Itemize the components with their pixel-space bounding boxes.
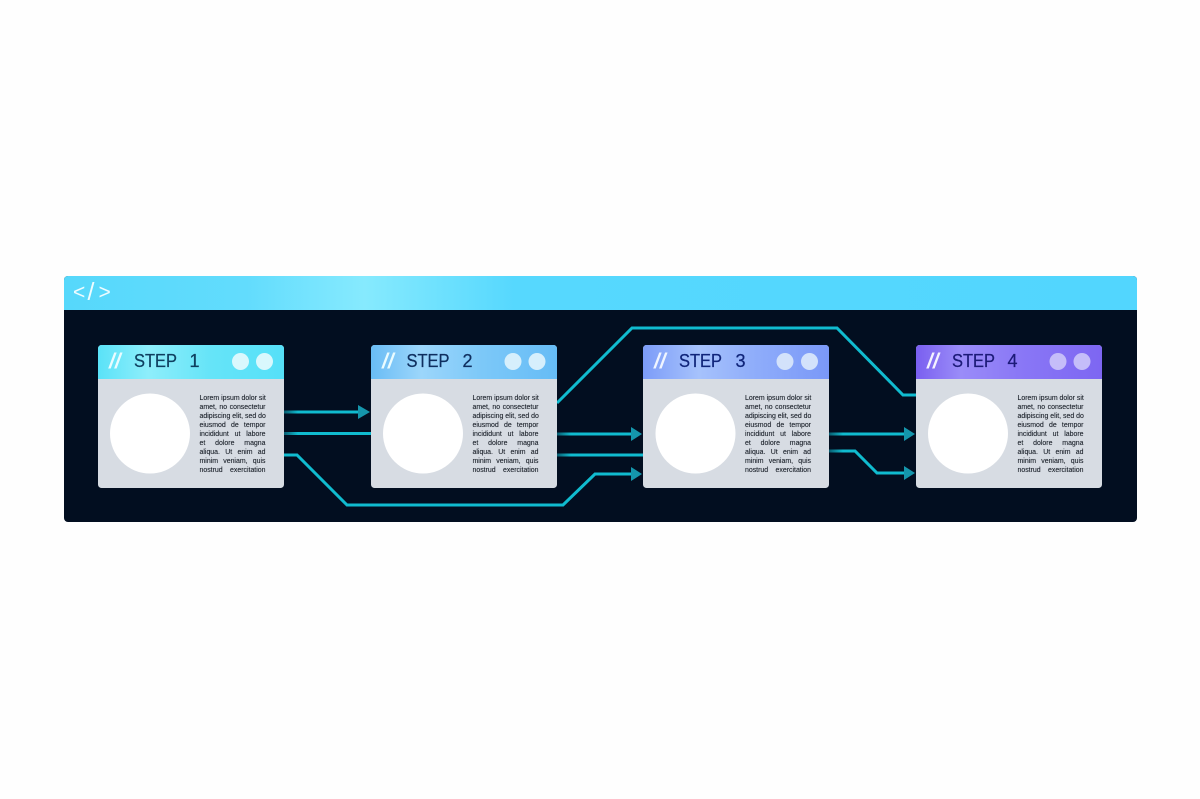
- text block: step 4 body: incididunt ut labore: [1018, 431, 1084, 438]
- step 1 heading: STEP: [134, 351, 177, 371]
- icon: code brackets: >: [98, 281, 111, 304]
- arrow: step 1 to step 2 upper: [284, 405, 370, 419]
- panel: step 1 card: [98, 345, 284, 488]
- window title bar: [64, 276, 1137, 310]
- line: step 2 to step 4 upper route: [557, 328, 916, 403]
- step 3 image circle: [656, 394, 736, 474]
- text block: step 3 body: eiusmod de tempor: [745, 422, 811, 429]
- arrow: step 3 to step 4 lower: [829, 451, 915, 480]
- panel: step 4 card: [916, 345, 1102, 488]
- step 3 window dots: [776, 353, 818, 370]
- text block: step 4 body: et dolore magna: [1018, 440, 1084, 447]
- text block: step 1 body: incididunt ut labore: [200, 431, 266, 438]
- text block: step 2 body: eiusmod de tempor: [472, 422, 538, 429]
- step 3 heading: [653, 350, 746, 373]
- text block: step 1 body: eiusmod de tempor: [200, 422, 266, 429]
- text block: step 3 body: Lorem ipsum dolor sit: [745, 394, 811, 402]
- text block: step 2 body: et dolore magna: [472, 440, 538, 447]
- text block: step 1 body: nostrud exercitation: [200, 467, 266, 474]
- text block: step 2 body: nostrud exercitation: [472, 467, 538, 474]
- text block: step 3 body: minim veniam, quis: [745, 458, 811, 465]
- text block: step 2 body: Lorem ipsum dolor sit: [472, 394, 539, 402]
- step 1 heading: //: [108, 350, 123, 373]
- step 4 window dots: [1050, 353, 1090, 370]
- text block: step 2 body: [472, 394, 539, 474]
- step 2 heading: //: [381, 350, 396, 373]
- icon: code brackets: <: [73, 281, 85, 304]
- step 1 heading: [108, 350, 200, 373]
- text block: step 3 body: [745, 394, 812, 474]
- step 4 heading: STEP: [952, 351, 995, 371]
- text block: step 3 body: amet, no consectetur: [745, 404, 811, 411]
- arrow: step 2 to step 3: [556, 427, 642, 441]
- step 4 heading: [926, 350, 1018, 373]
- line: step 2 to step 3 middle: [556, 454, 643, 456]
- text block: step 2 body: adipiscing elit, sed do: [472, 413, 539, 420]
- text block: step 2 body: incididunt ut labore: [472, 431, 538, 438]
- text block: step 2 body: amet, no consectetur: [472, 404, 538, 411]
- step 2 image circle: [383, 394, 463, 474]
- text block: step 1 body: [200, 394, 266, 474]
- step 4 heading: 4: [1008, 351, 1018, 371]
- text block: step 4 body: Lorem ipsum dolor sit: [1018, 394, 1084, 402]
- text block: step 1 body: Lorem ipsum dolor sit: [200, 394, 266, 402]
- step 2 heading: STEP: [406, 351, 450, 371]
- arrow: step 1 to step 3 lower route: [284, 455, 642, 505]
- text block: step 3 body: nostrud exercitation: [745, 467, 811, 474]
- text block: step 1 body: aliqua. Ut enim ad: [200, 449, 266, 456]
- arrow: step 3 to step 4 upper: [829, 427, 915, 441]
- connector lines and arrows: [284, 328, 916, 505]
- text block: step 3 body: et dolore magna: [745, 440, 811, 447]
- text block: step 1 body: et dolore magna: [200, 440, 266, 447]
- text block: step 1 body: amet, no consectetur: [200, 404, 266, 411]
- step 4 image circle: [928, 394, 1008, 474]
- text block: step 4 body: amet, no consectetur: [1018, 404, 1084, 411]
- text block: step 3 body: aliqua. Ut enim ad: [745, 449, 811, 456]
- text block: step 4 body: minim veniam, quis: [1018, 458, 1084, 465]
- panel: dark window: [64, 276, 1137, 522]
- text block: step 4 body: adipiscing elit, sed do: [1018, 413, 1084, 420]
- text block: step 4 body: aliqua. Ut enim ad: [1018, 449, 1084, 456]
- step 3 heading: STEP: [679, 351, 722, 371]
- step 4 heading: //: [926, 350, 941, 373]
- text block: step 1 body: minim veniam, quis: [200, 458, 266, 465]
- panel: step 2 card: [371, 345, 557, 488]
- step 2 window dots: [504, 353, 546, 370]
- text block: step 3 body: incididunt ut labore: [745, 431, 811, 438]
- line: step 1 to step 2 middle: [284, 432, 371, 435]
- text block: step 2 body: aliqua. Ut enim ad: [472, 449, 538, 456]
- text block: step 4 body: eiusmod de tempor: [1018, 422, 1084, 429]
- step 3 heading: //: [653, 350, 668, 373]
- step 2 heading: 2: [462, 351, 473, 371]
- text block: step 2 body: minim veniam, quis: [472, 458, 538, 465]
- icon: code brackets: /: [88, 278, 94, 306]
- step 1 heading: 1: [190, 351, 200, 371]
- step 1 image circle: [110, 394, 190, 474]
- step 2 heading: [381, 350, 473, 373]
- step 3 heading: 3: [736, 351, 746, 371]
- text block: step 1 body: adipiscing elit, sed do: [200, 413, 266, 420]
- panel: step 3 card: [643, 345, 829, 488]
- text block: step 3 body: adipiscing elit, sed do: [745, 413, 811, 420]
- text block: step 4 body: [1018, 394, 1084, 474]
- text block: step 4 body: nostrud exercitation: [1018, 467, 1084, 474]
- step 1 window dots: [232, 353, 273, 370]
